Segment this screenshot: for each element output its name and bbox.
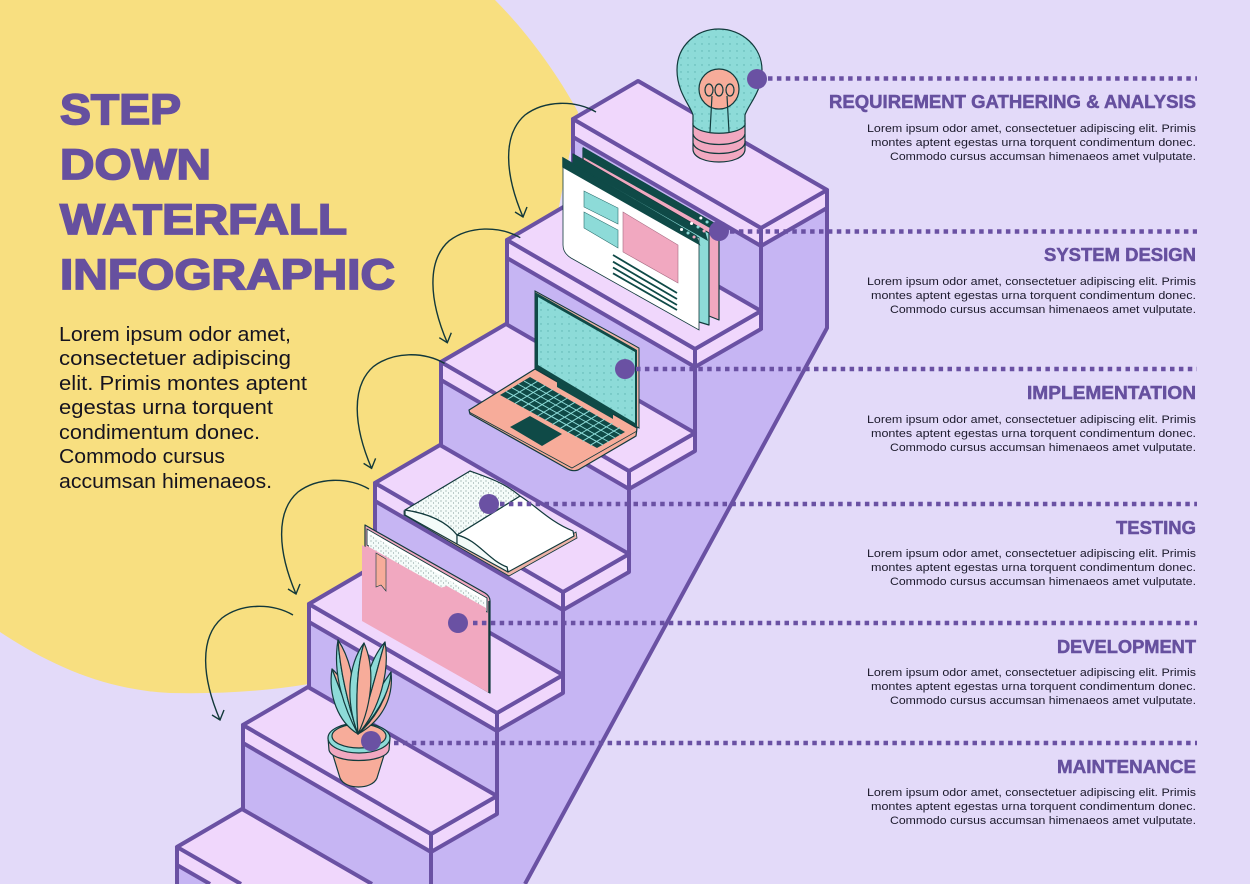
intro text block <box>59 324 307 493</box>
label: maintenance: MAINTENANCE <box>1057 757 1196 777</box>
label: testing: TESTING <box>1116 518 1196 538</box>
step 4 <box>375 445 629 693</box>
label: implementation: montes aptent egestas urna torquent condimentum donec. <box>871 428 1196 440</box>
intro text block: consectetuer adipiscing <box>59 348 291 370</box>
label: system design <box>867 245 1196 316</box>
arrow 5 <box>206 606 293 720</box>
label: requirement gathering: REQUIREMENT GATHERING & ANALYSIS <box>829 92 1196 112</box>
step 2 <box>507 202 761 451</box>
label: testing <box>867 518 1196 588</box>
connector: implementation <box>615 359 1197 379</box>
label: system design: Lorem ipsum odor amet, consectetuer adipiscing elit. Primis <box>867 276 1196 288</box>
icon: laptop <box>469 291 639 471</box>
step 5 <box>309 566 563 814</box>
label: development: montes aptent egestas urna torquent condimentum donec. <box>871 681 1196 693</box>
step 6 <box>243 687 497 884</box>
intro text block: Commodo cursus <box>59 446 225 468</box>
intro text block: Lorem ipsum odor amet, <box>59 324 291 346</box>
connector: requirement gathering <box>747 69 1197 89</box>
step 1 <box>573 81 827 330</box>
label: implementation: IMPLEMENTATION <box>1027 383 1196 403</box>
yellow blob <box>0 0 578 693</box>
arrow 2 <box>433 229 520 343</box>
icon: light bulb <box>677 29 762 162</box>
intro text block: accumsan himenaeos. <box>59 471 272 493</box>
arrow 4 <box>282 480 369 594</box>
step 7 <box>177 809 372 884</box>
label: system design: Commodo cursus accumsan himenaeos amet vulputate. <box>890 304 1196 316</box>
label: development: Lorem ipsum odor amet, consectetuer adipiscing elit. Primis <box>867 667 1196 679</box>
label: testing: Lorem ipsum odor amet, consectetuer adipiscing elit. Primis <box>867 548 1196 560</box>
label: maintenance: montes aptent egestas urna torquent condimentum donec. <box>871 801 1196 813</box>
label: requirement gathering: montes aptent egestas urna torquent condimentum donec. <box>871 137 1196 149</box>
label: development: Commodo cursus accumsan himenaeos amet vulputate. <box>890 695 1196 707</box>
label: requirement gathering: Lorem ipsum odor amet, consectetuer adipiscing elit. Primis <box>867 123 1196 135</box>
icon: design windows <box>563 147 719 330</box>
label: testing: Commodo cursus accumsan himenaeos amet vulputate. <box>890 576 1196 588</box>
label: maintenance: Lorem ipsum odor amet, consectetuer adipiscing elit. Primis <box>867 787 1196 799</box>
step 3 <box>441 324 695 572</box>
title: WATERFALL <box>60 196 347 244</box>
connector: maintenance <box>361 731 1197 751</box>
label: system design: montes aptent egestas urna torquent condimentum donec. <box>871 290 1196 302</box>
icon: folder <box>362 525 490 693</box>
connector: testing <box>479 494 1197 514</box>
label: implementation: Lorem ipsum odor amet, consectetuer adipiscing elit. Primis <box>867 414 1196 426</box>
connector: development <box>448 613 1197 633</box>
label: requirement gathering <box>829 92 1196 163</box>
title: STEP <box>60 86 181 134</box>
label: testing: montes aptent egestas urna torquent condimentum donec. <box>871 562 1196 574</box>
label: development <box>867 637 1196 707</box>
title: DOWN <box>60 141 211 189</box>
label: requirement gathering: Commodo cursus accumsan himenaeos amet vulputate. <box>890 151 1196 163</box>
intro text block: elit. Primis montes aptent <box>59 373 307 395</box>
title: INFOGRAPHIC <box>60 251 395 299</box>
staircase wall <box>177 81 827 884</box>
connector: system design <box>709 221 1197 241</box>
label: system design: SYSTEM DESIGN <box>1044 245 1196 265</box>
icon: open book <box>404 471 577 576</box>
label: implementation: Commodo cursus accumsan himenaeos amet vulputate. <box>890 442 1196 454</box>
label: implementation <box>867 383 1196 454</box>
title <box>60 86 395 299</box>
arrow 3 <box>357 355 445 468</box>
label: development: DEVELOPMENT <box>1057 637 1196 657</box>
intro text block: condimentum donec. <box>59 422 260 444</box>
label: maintenance <box>867 757 1196 827</box>
label: maintenance: Commodo cursus accumsan himenaeos amet vulputate. <box>890 815 1196 827</box>
intro text block: egestas urna torquent <box>59 397 273 419</box>
icon: plant <box>328 640 391 787</box>
arrow 1 <box>509 103 596 217</box>
